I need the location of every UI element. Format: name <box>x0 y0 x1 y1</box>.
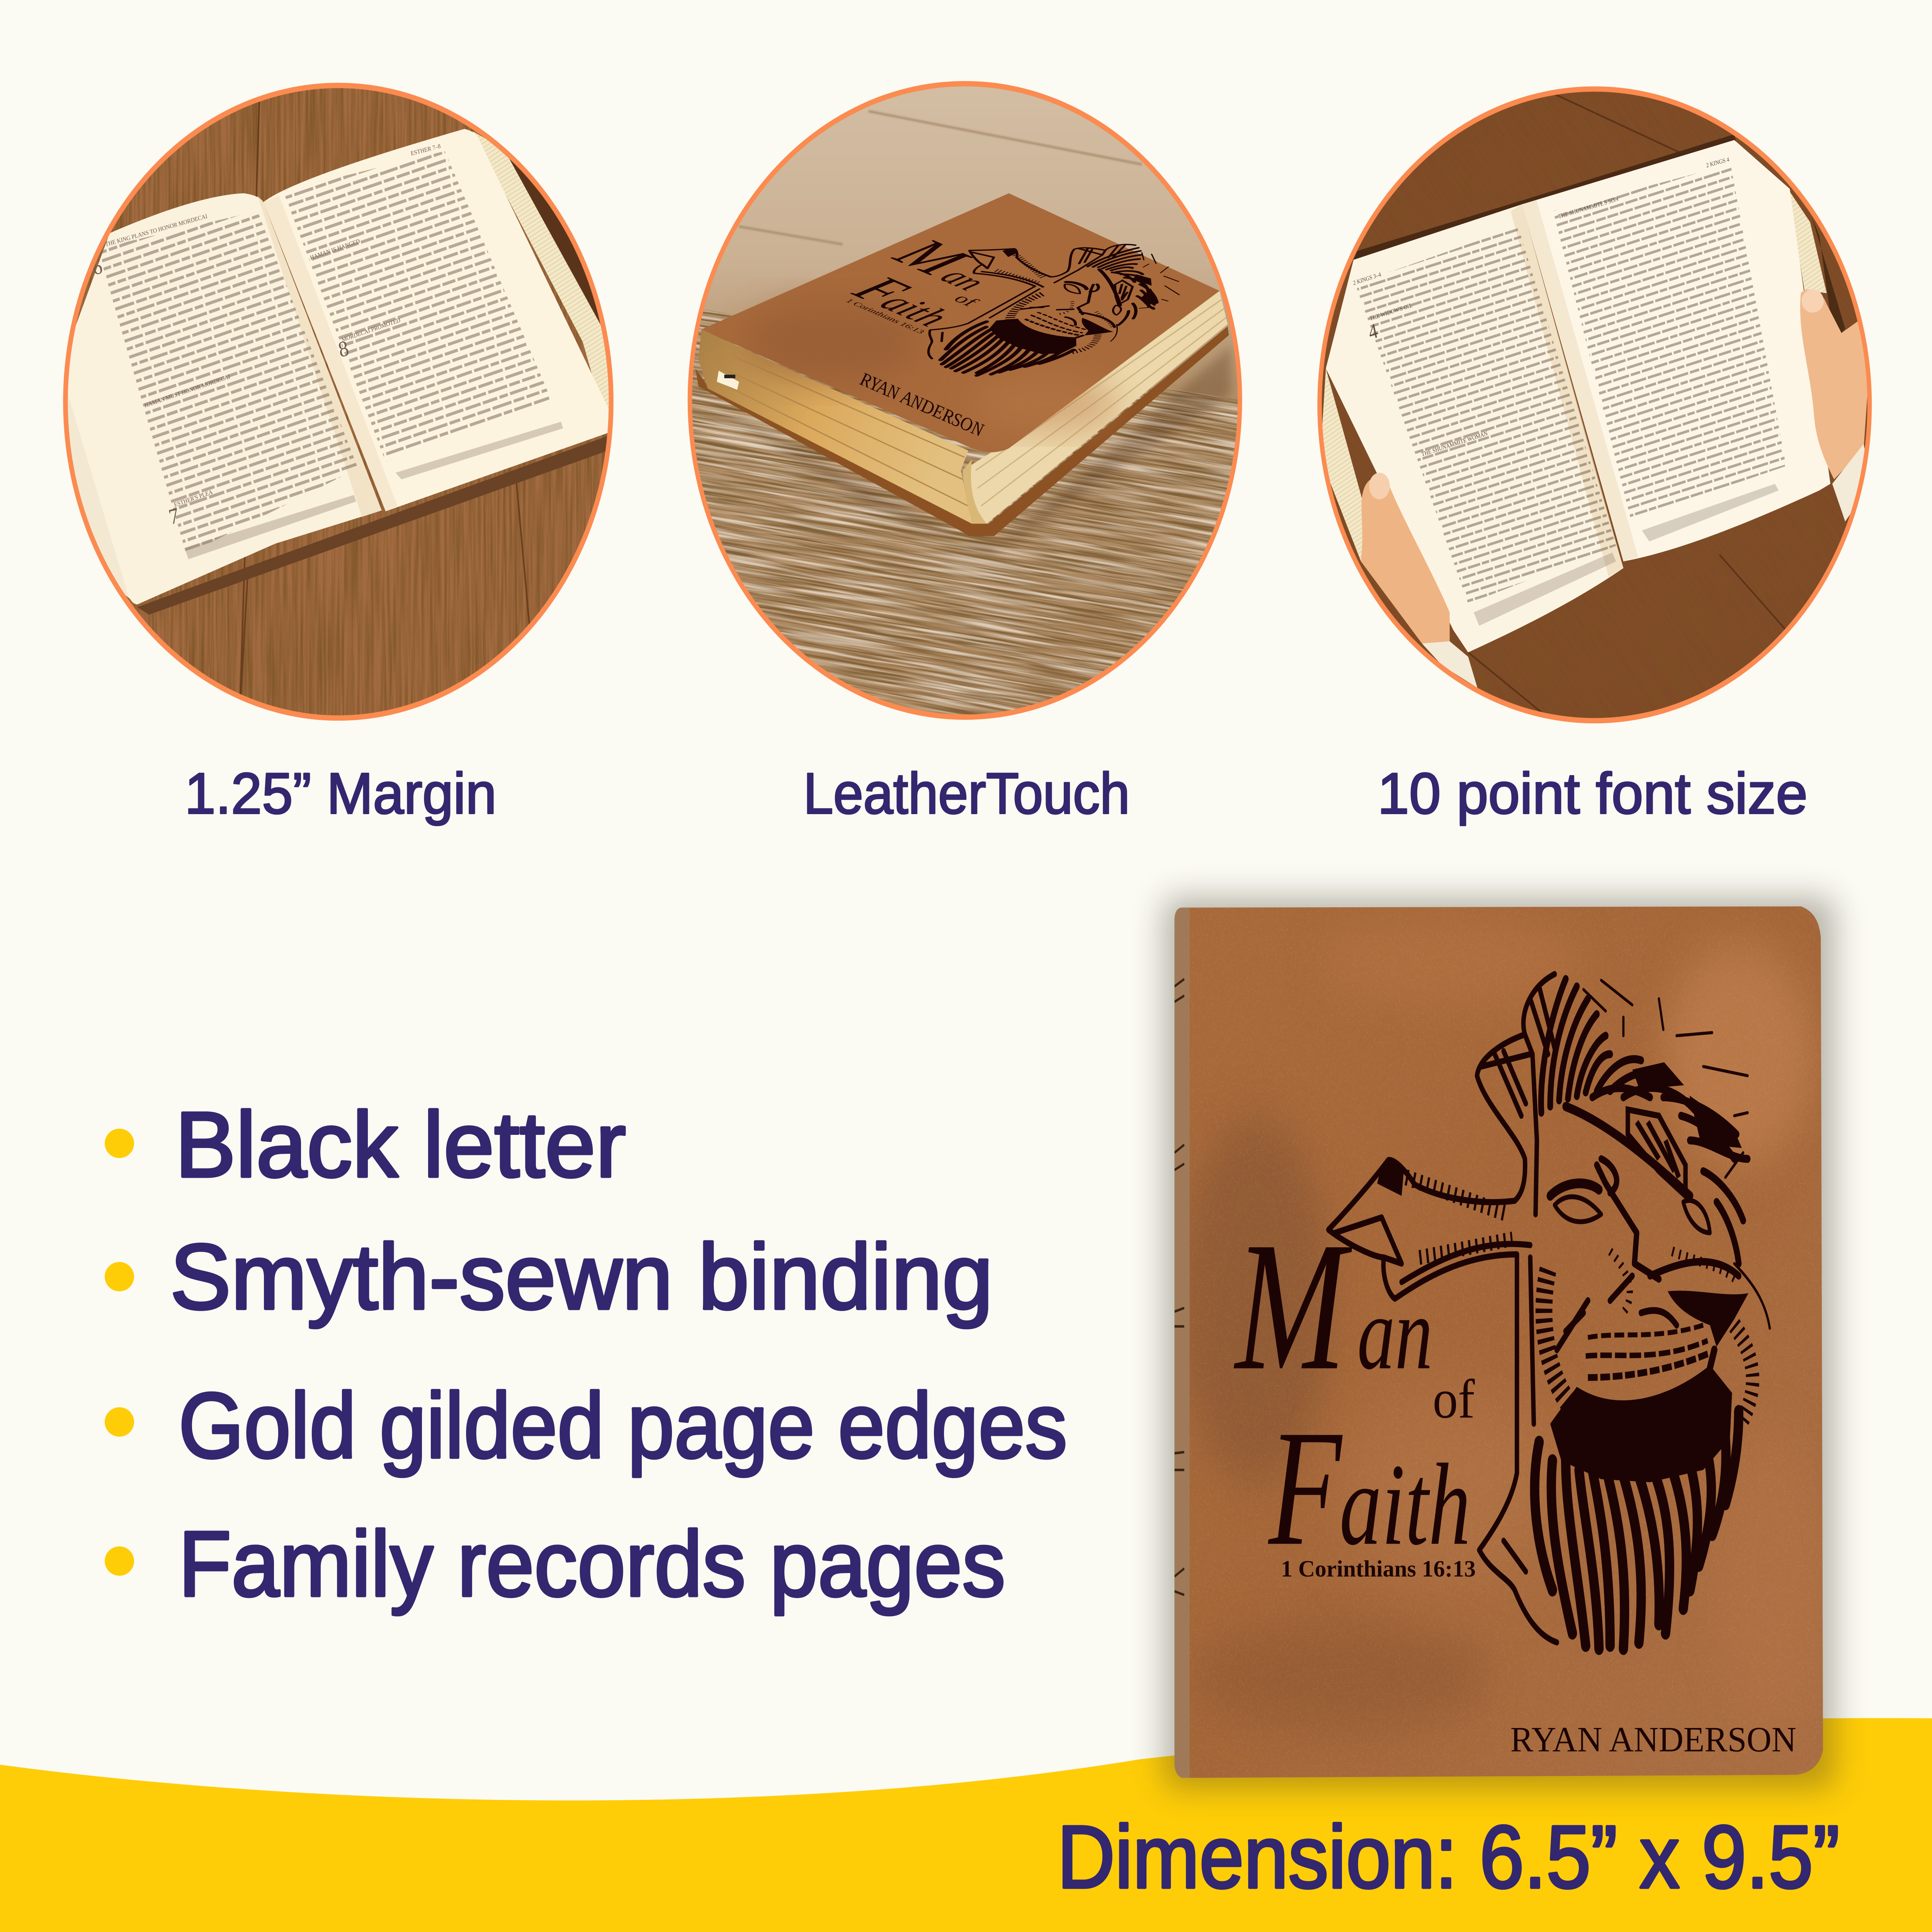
page headings: THE SHUNAMMITE WOMAN <box>1421 430 1488 458</box>
engraved cover title: of <box>949 292 984 309</box>
page headings: ESTHER'S PLEA <box>173 489 213 509</box>
bullet 1 <box>105 1129 134 1158</box>
feature list <box>105 1093 1067 1616</box>
page headings <box>90 143 441 529</box>
caption: leather: LeatherTouch <box>803 761 1130 826</box>
engraved title <box>1233 1204 1476 1582</box>
engraved name: RYAN ANDERSON <box>1510 1720 1796 1759</box>
page headings: THE SHUNAMMITE'S SON <box>1558 196 1619 220</box>
page headings: THE WIDOW'S OIL <box>1369 302 1413 322</box>
leather bible cover <box>1171 900 1827 1781</box>
photo: hands holding open bible <box>1121 0 1932 975</box>
photo: open bible showing margin <box>58 76 618 728</box>
page headings: MORDECAI PROMOTED <box>341 317 401 344</box>
page headings: THE KING PLANS TO HONOR MORDECAI <box>105 213 208 248</box>
page headings: 8 <box>336 336 351 362</box>
dimension label: Dimension: 6.5” x 9.5” <box>1057 1807 1840 1906</box>
page headings: ESTHER 7–8 <box>410 143 441 157</box>
page headings <box>1352 156 1730 458</box>
engraved title: aith <box>1340 1440 1471 1570</box>
engraved title: 1 Corinthians 16:13 <box>1281 1556 1476 1582</box>
bullet 3 <box>105 1407 134 1437</box>
bullet 2 <box>105 1262 134 1291</box>
page headings: 6 <box>90 253 104 280</box>
yellow wave band <box>0 1718 1932 1932</box>
engraved lion and cross artwork <box>1328 974 1770 1648</box>
book shadow <box>1163 896 1835 1789</box>
caption: margin: 1.25” Margin <box>185 761 497 826</box>
caption: font size: 10 point font size <box>1378 761 1808 826</box>
engraved title: of <box>1433 1369 1475 1430</box>
engraved title: an <box>1357 1276 1433 1391</box>
photo: closed bible leather touch <box>553 80 1373 862</box>
engraved cover name: RYAN ANDERSON <box>857 368 986 442</box>
feature: family records: Family records pages <box>179 1512 1005 1616</box>
icon: right hand <box>1800 289 1871 480</box>
engraved cover title: 1 Corinthians 16:13 <box>843 298 927 335</box>
page headings: 2 KINGS 3–4 <box>1352 271 1382 287</box>
page headings: HAMAN MUST HONOR MORDECAI <box>144 373 231 409</box>
icon: left hand <box>1361 473 1450 643</box>
bullet 4 <box>105 1546 134 1576</box>
engraved cover title: aith <box>870 288 960 332</box>
engraved cover title: M <box>878 230 987 285</box>
engraved title: M <box>1233 1204 1354 1409</box>
feature: binding: Smyth-sewn binding <box>170 1225 993 1328</box>
page headings: 2 KINGS 4 <box>1706 156 1730 169</box>
engraved cover title <box>825 230 1035 335</box>
spine <box>1175 903 1190 1781</box>
page headings: 4 <box>1366 319 1380 344</box>
page headings: 7 <box>167 503 181 529</box>
page headings: HAMAN IS HANGED <box>310 238 361 261</box>
engraved lion artwork <box>842 207 1219 395</box>
engraved cover title: an <box>931 263 996 295</box>
engraved title: F <box>1267 1396 1344 1580</box>
engraved cover title: F <box>839 268 925 312</box>
feature: black letter: Black letter <box>175 1093 626 1196</box>
feature: gilded edges: Gold gilded page edges <box>179 1374 1067 1477</box>
